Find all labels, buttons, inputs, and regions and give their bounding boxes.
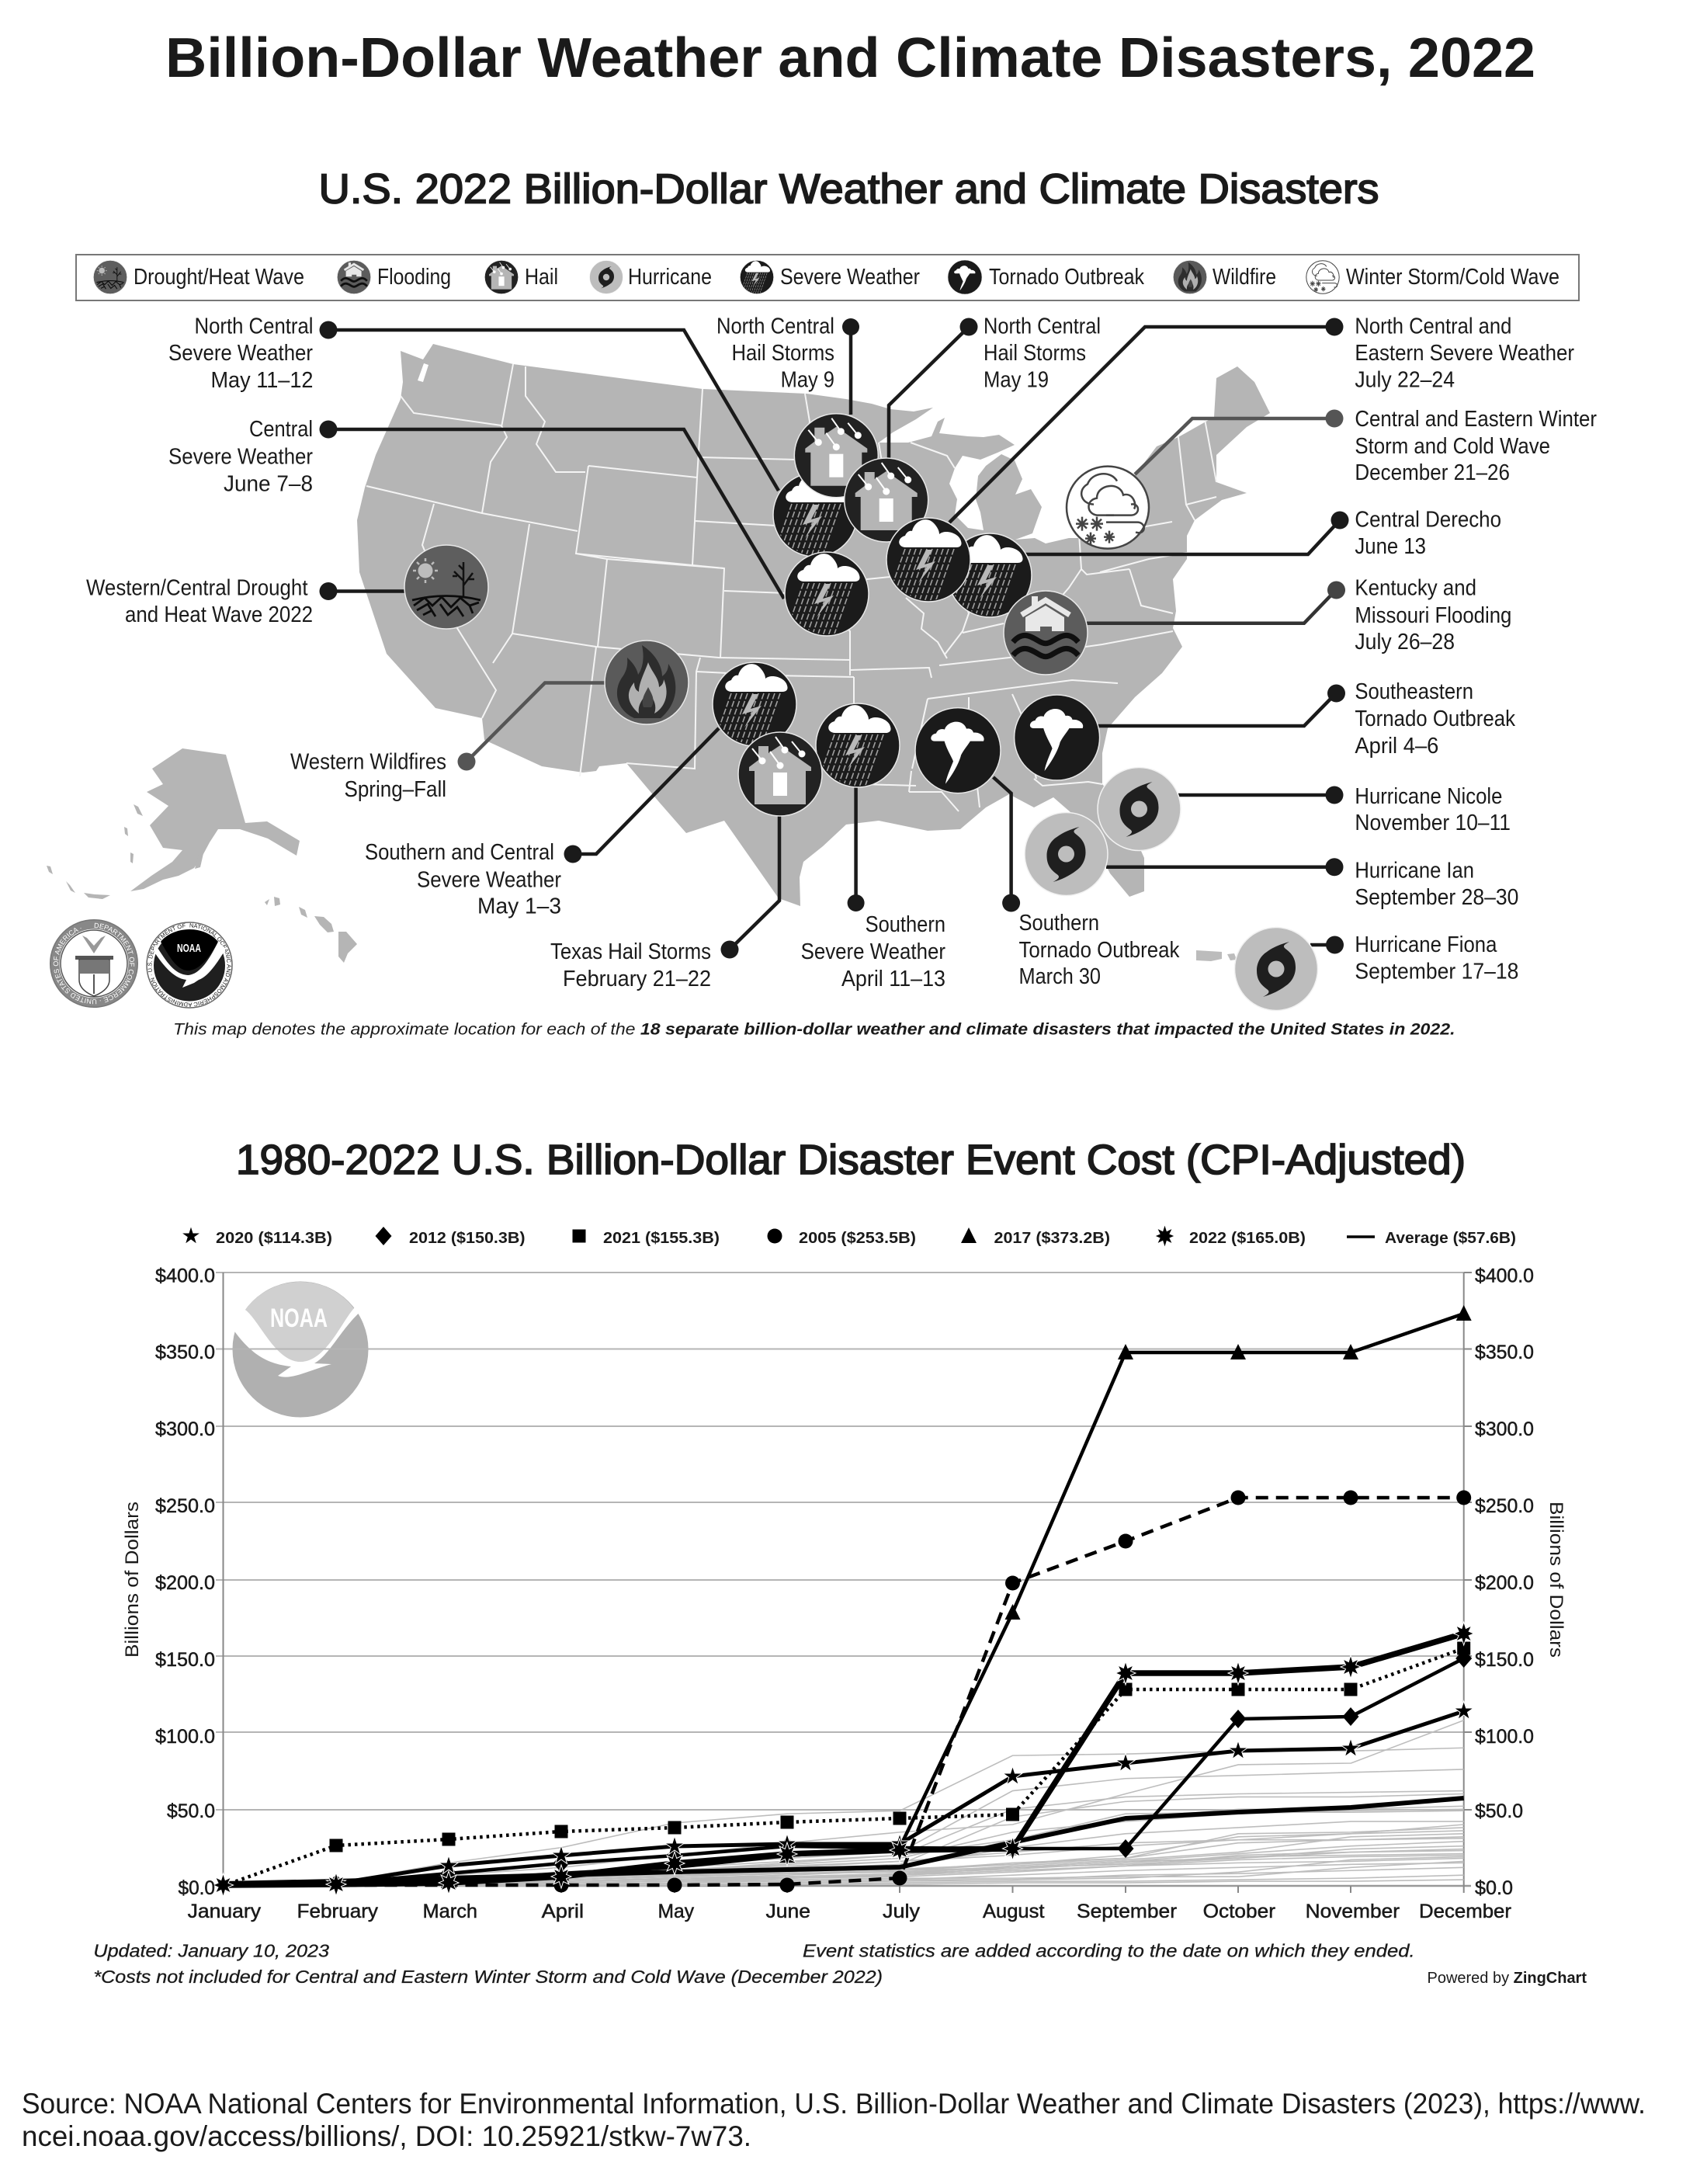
legend item: hurricane: Hurricane bbox=[628, 265, 712, 290]
icon: southeastern tornado bbox=[1015, 695, 1100, 780]
axis labels: left dollars: $0.0 bbox=[179, 1877, 215, 1899]
logo: NOAA seal: NATIONAL OCEANIC AND ATMOSPHERIC ADMINISTRATION · U.S. DEPARTMENT OF COMMERCE bbox=[147, 923, 231, 1007]
axis labels: left dollars: $50.0 bbox=[167, 1800, 215, 1822]
title: Billion-Dollar Weather and Climate Disasters, 2022 bbox=[165, 27, 1535, 89]
panel: map legend bbox=[76, 255, 1579, 300]
icon: Texas hail bbox=[738, 732, 822, 816]
axis labels: months: March bbox=[422, 1901, 477, 1922]
label: Kentucky and Missouri Flooding bbox=[1355, 576, 1511, 655]
label: North Central Hail Storms May 19 bbox=[984, 314, 1101, 393]
icon: hurricane Ian bbox=[1025, 812, 1108, 896]
label: Southern Tornado Outbreak bbox=[1018, 911, 1180, 989]
label: Texas Hail Storms bbox=[550, 939, 711, 991]
axis title: left: Billions of Dollars bbox=[122, 1502, 143, 1658]
legend item: hail: Hail bbox=[525, 265, 558, 290]
label: Southern and Central Severe Weather: May 1–3 bbox=[477, 894, 561, 919]
label: Southern and Central Severe Weather bbox=[365, 840, 561, 919]
label: North Central Severe Weather: May 11–12 bbox=[211, 368, 314, 393]
icon: hail May 9 bbox=[794, 414, 878, 498]
label: North Central and Eastern Severe Weather: July 22–24 bbox=[1355, 368, 1455, 393]
axis labels: right dollars bbox=[1475, 1266, 1534, 1899]
legend: 2020: 2020 ($114.3B) bbox=[216, 1230, 332, 1247]
note: costs: *Costs not included for Central and Eastern Winter Storm and Cold Wave (December 2022) bbox=[93, 1967, 883, 1987]
legend: 2022: 2022 ($165.0B) bbox=[1189, 1230, 1306, 1247]
label: Southern Tornado Outbreak: Southern bbox=[1018, 911, 1099, 936]
axis labels: months bbox=[188, 1901, 1511, 1922]
legend: 2020 bbox=[182, 1226, 332, 1247]
label: North Central Hail Storms May 9: Hail Storms bbox=[731, 341, 834, 366]
heading: chart section: 1980-2022 U.S. Billion-Dollar Disaster Event Cost (CPI-Adjusted) bbox=[236, 1137, 1466, 1183]
icon: severe weather July bbox=[886, 518, 970, 602]
label: Central and Eastern Winter Storm bbox=[1355, 407, 1597, 485]
legend item: severe weather bbox=[740, 260, 920, 294]
label: Kentucky and Missouri Flooding: Kentucky and bbox=[1355, 576, 1476, 601]
label: Southern Severe Weather bbox=[801, 912, 945, 991]
series: 2005 bbox=[224, 1491, 1471, 1893]
axis labels: right dollars: $0.0 bbox=[1475, 1877, 1513, 1899]
label: Kentucky and Missouri Flooding: July 26–28 bbox=[1355, 630, 1455, 655]
source line 1: Source: NOAA National Centers for Environmental Information, U.S. Billion-Dollar Weather and Climate Disasters (2023), https://www. bbox=[22, 2088, 1646, 2120]
source line 2: ncei.noaa.gov/access/billions/, DOI: 10.25921/stkw-7w73. bbox=[22, 2120, 751, 2152]
legend item: drought bbox=[93, 260, 304, 294]
label: Texas Hail Storms: Texas Hail Storms bbox=[550, 939, 711, 964]
label: North Central Hail Storms May 9 bbox=[716, 314, 834, 393]
credit: ZingChart: Powered by ZingChart bbox=[1427, 1970, 1587, 1987]
icon: central derecho bbox=[948, 533, 1032, 617]
axis labels: months: July bbox=[883, 1901, 921, 1922]
note: updated: Updated: January 10, 2023 bbox=[93, 1941, 329, 1961]
label: Southern Tornado Outbreak: Tornado Outbreak bbox=[1018, 938, 1180, 963]
logo: NOAA seal bbox=[146, 922, 233, 1009]
legend: 2021: 2021 ($155.3B) bbox=[603, 1230, 720, 1247]
legend item: winter storm: Winter Storm/Cold Wave bbox=[1346, 265, 1559, 290]
map: Puerto Rico bbox=[1196, 950, 1237, 961]
legend item: flooding: Flooding bbox=[377, 265, 451, 290]
label: North Central Severe Weather: Severe Weather bbox=[168, 341, 313, 366]
map: Alaska bbox=[47, 748, 300, 899]
label: North Central Hail Storms May 19: Hail Storms bbox=[984, 341, 1086, 366]
axis labels: right dollars: $100.0 bbox=[1475, 1726, 1534, 1748]
legend item: tornado outbreak: Tornado Outbreak bbox=[989, 265, 1144, 290]
legend: average: Average ($57.6B) bbox=[1385, 1230, 1516, 1247]
series: 2021 bbox=[224, 1641, 1470, 1886]
label: Western Wildfires: Spring–Fall bbox=[345, 777, 446, 802]
label: Hurricane Fiona: Hurricane Fiona bbox=[1355, 932, 1497, 957]
label: Southeastern Tornado Outbreak: Southeastern bbox=[1355, 679, 1473, 704]
label: Western/Central Drought: and Heat Wave 2022 bbox=[125, 602, 313, 627]
axis labels: months: June bbox=[765, 1901, 810, 1922]
chart gridlines and axes bbox=[216, 1273, 1472, 1893]
heading: map section: U.S. 2022 Billion-Dollar Weather and Climate Disasters bbox=[318, 166, 1379, 213]
legend: 2017 bbox=[961, 1227, 1110, 1247]
label: Southeastern Tornado Outbreak bbox=[1355, 679, 1515, 759]
axis labels: right dollars: $300.0 bbox=[1475, 1418, 1534, 1440]
legend item: severe weather: Severe Weather bbox=[780, 265, 920, 290]
icon: flooding bbox=[1004, 591, 1088, 675]
label: Southern and Central Severe Weather: Severe Weather bbox=[417, 868, 561, 893]
label: Hurricane Fiona bbox=[1355, 932, 1518, 984]
label: Central Severe Weather: Severe Weather bbox=[168, 444, 313, 469]
axis labels: right dollars: $200.0 bbox=[1475, 1572, 1534, 1594]
label: Hurricane Nicole: Hurricane Nicole bbox=[1355, 784, 1502, 809]
axis labels: right dollars: $150.0 bbox=[1475, 1649, 1534, 1671]
axis labels: months: November bbox=[1306, 1901, 1400, 1922]
label: Hurricane Fiona: September 17–18 bbox=[1355, 960, 1518, 984]
label: Central Derecho bbox=[1355, 508, 1501, 559]
label: North Central Hail Storms May 9: North Central bbox=[716, 314, 834, 339]
note: event statistics: Event statistics are added according to the date on which they ended. bbox=[803, 1941, 1415, 1961]
icon: drought bbox=[404, 545, 488, 629]
label: Southern Severe Weather: Southern bbox=[866, 912, 945, 937]
label: Central Severe Weather: Central bbox=[249, 417, 313, 442]
callout dots bbox=[320, 318, 1349, 958]
legend: 2012 bbox=[376, 1227, 526, 1247]
legend item: flooding bbox=[337, 260, 451, 294]
icon: hail May 19 bbox=[845, 458, 928, 542]
label: North Central Hail Storms May 9: May 9 bbox=[781, 368, 834, 393]
label: Central and Eastern Winter Storm: December 21–26 bbox=[1355, 460, 1510, 485]
map footnote: This map denotes the approximate location for each of the 18 separate billion-dollar weather and climate disasters that impacted the United States in 2022. bbox=[173, 1020, 1455, 1039]
legend item: wildfire: Wildfire bbox=[1213, 265, 1276, 290]
axis labels: months: April bbox=[542, 1901, 584, 1922]
series: 2017 bbox=[224, 1305, 1472, 1888]
label: Texas Hail Storms: February 21–22 bbox=[563, 967, 711, 991]
axis labels: left dollars: $400.0 bbox=[155, 1266, 215, 1287]
axis labels: months: May bbox=[658, 1901, 694, 1922]
label: Central and Eastern Winter Storm: Central and Eastern Winter bbox=[1355, 407, 1597, 432]
axis labels: left dollars: $250.0 bbox=[155, 1495, 215, 1517]
legend: 2012: 2012 ($150.3B) bbox=[409, 1230, 526, 1247]
label: Southern Severe Weather: April 11–13 bbox=[841, 967, 945, 991]
icon: severe weather April 11-13 bbox=[816, 703, 900, 787]
label: Central Derecho: Central Derecho bbox=[1355, 508, 1501, 533]
icon: southern tornado bbox=[915, 708, 1001, 793]
legend item: tornado outbreak bbox=[948, 260, 1144, 294]
map: Hawaii bbox=[265, 897, 357, 963]
series: average bbox=[224, 1798, 1464, 1884]
axis labels: months: August bbox=[983, 1901, 1045, 1922]
icon: hurricane Fiona bbox=[1234, 927, 1318, 1011]
label: North Central and Eastern Severe Weather: Eastern Severe Weather bbox=[1355, 341, 1574, 366]
label: North Central Hail Storms May 19: May 19 bbox=[984, 368, 1049, 393]
label: Central Derecho: June 13 bbox=[1355, 534, 1426, 559]
label: Southern and Central Severe Weather: Southern and Central bbox=[365, 840, 554, 865]
axis labels: right dollars: $350.0 bbox=[1475, 1342, 1534, 1363]
axis labels: right dollars: $400.0 bbox=[1475, 1266, 1534, 1287]
axis labels: left dollars: $150.0 bbox=[155, 1649, 215, 1671]
legend: 2005: 2005 ($253.5B) bbox=[799, 1230, 916, 1247]
map: contiguous United States bbox=[357, 344, 1270, 906]
axis title: right: Billions of Dollars bbox=[1546, 1502, 1566, 1658]
legend item: hail bbox=[484, 260, 558, 294]
watermark: NOAA logo: NOAA bbox=[270, 1304, 328, 1333]
label: Western/Central Drought: Western/Central Drought bbox=[86, 576, 307, 601]
label: North Central Severe Weather bbox=[168, 314, 314, 393]
icon: severe weather May 1-3 bbox=[713, 662, 796, 746]
axis labels: left dollars: $200.0 bbox=[155, 1572, 215, 1594]
icon: wildfire bbox=[605, 641, 689, 724]
logo: Department of Commerce seal: DEPARTMENT OF COMMERCE · UNITED STATES OF AMERICA · bbox=[53, 922, 135, 1005]
label: Hurricane Ian: Hurricane Ian bbox=[1355, 859, 1474, 884]
label: Southern Tornado Outbreak: March 30 bbox=[1018, 964, 1101, 989]
label: Western Wildfires: Western Wildfires bbox=[290, 750, 446, 775]
label: Western Wildfires bbox=[290, 750, 446, 802]
watermark: NOAA logo bbox=[211, 1281, 368, 1418]
legend: 2005 bbox=[767, 1228, 916, 1247]
legend item: drought: Drought/Heat Wave bbox=[134, 265, 304, 290]
label: North Central and Eastern Severe Weather: North Central and bbox=[1355, 314, 1511, 339]
label: Hurricane Ian: September 28–30 bbox=[1355, 885, 1518, 910]
axis labels: left dollars: $100.0 bbox=[155, 1726, 215, 1748]
logo: NOAA seal: NOAA bbox=[177, 942, 201, 955]
axis labels: months: January bbox=[188, 1901, 262, 1922]
legend item: winter storm bbox=[1306, 261, 1559, 293]
axis labels: months: December bbox=[1419, 1901, 1511, 1922]
chart: grey lines for other years bbox=[224, 1720, 1464, 1886]
legend: 2017: 2017 ($373.2B) bbox=[994, 1230, 1110, 1247]
label: Central Severe Weather bbox=[168, 417, 313, 497]
series: 2022 bbox=[213, 1622, 1474, 1897]
label: Southeastern Tornado Outbreak: Tornado Outbreak bbox=[1355, 707, 1515, 731]
axis labels: right dollars: $250.0 bbox=[1475, 1495, 1534, 1517]
label: Hurricane Nicole bbox=[1355, 784, 1511, 835]
axis labels: months: February bbox=[297, 1901, 379, 1922]
axis labels: right dollars: $50.0 bbox=[1475, 1800, 1523, 1822]
label: Southern Severe Weather: Severe Weather bbox=[801, 939, 945, 964]
icon: winter storm bbox=[1067, 467, 1149, 549]
icon: severe weather June 7-8 bbox=[785, 552, 869, 636]
label: Central and Eastern Winter Storm: Storm and Cold Wave bbox=[1355, 434, 1550, 459]
axis labels: left dollars bbox=[155, 1266, 215, 1899]
legend item: hurricane bbox=[590, 261, 712, 293]
label: Hurricane Nicole: November 10–11 bbox=[1355, 811, 1511, 835]
label: North Central and Eastern Severe Weather bbox=[1355, 314, 1574, 393]
axis labels: left dollars: $300.0 bbox=[155, 1418, 215, 1440]
chart legend bbox=[182, 1224, 1516, 1248]
icon: severe weather May 11-12 bbox=[773, 473, 857, 557]
label: North Central Hail Storms May 19: North Central bbox=[984, 314, 1101, 339]
label: Kentucky and Missouri Flooding: Missouri Flooding bbox=[1355, 603, 1511, 628]
label: North Central Severe Weather: North Central bbox=[194, 314, 314, 339]
callout connector lines bbox=[328, 327, 1340, 950]
series: 2012 bbox=[224, 1649, 1472, 1893]
label: Hurricane Ian bbox=[1355, 859, 1518, 910]
axis labels: months: October bbox=[1203, 1901, 1275, 1922]
label: Central Severe Weather: June 7–8 bbox=[224, 472, 313, 497]
series: 2020 bbox=[224, 1701, 1473, 1891]
axis labels: left dollars: $350.0 bbox=[155, 1342, 215, 1363]
label: Southeastern Tornado Outbreak: April 4–6 bbox=[1355, 734, 1438, 759]
legend item: wildfire bbox=[1173, 260, 1276, 294]
axis labels: months: September bbox=[1077, 1901, 1177, 1922]
legend: 2022 bbox=[1155, 1224, 1306, 1248]
icon: hurricane Nicole bbox=[1098, 767, 1181, 851]
label: Western/Central Drought bbox=[86, 576, 313, 627]
